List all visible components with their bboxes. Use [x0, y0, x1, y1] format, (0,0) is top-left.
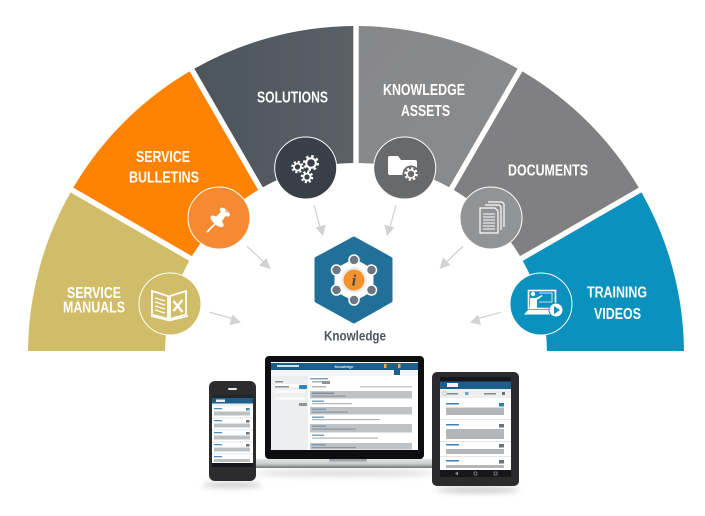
- device: laptop: [240, 356, 456, 477]
- label: service manuals: [63, 285, 125, 317]
- label: service bulletins: BULLETINS: [129, 170, 199, 187]
- arrow: bulletins to knowledge: [247, 246, 270, 269]
- label: training videos: VIDEOS: [594, 306, 641, 323]
- icon: document stack: [460, 187, 522, 249]
- label: service manuals: MANUALS: [63, 300, 125, 317]
- label: documents: DOCUMENTS: [508, 163, 588, 180]
- icon: book with tools: [139, 273, 201, 335]
- icon: knowledge hexagon: [316, 238, 391, 322]
- panel: service manuals segment: [28, 192, 189, 351]
- panel: service bulletins segment: [73, 71, 258, 256]
- label: training videos: [587, 285, 647, 323]
- label: knowledge assets: KNOWLEDGE: [383, 82, 465, 99]
- label: knowledge assets: ASSETS: [401, 103, 450, 120]
- icon: knowledge hexagon: i: [352, 272, 357, 290]
- icon: folder with gear: [374, 137, 436, 199]
- label: service bulletins: [129, 149, 199, 187]
- device: phone: [202, 381, 262, 488]
- heading: knowledge: Knowledge: [324, 328, 386, 344]
- label: knowledge assets: [383, 82, 465, 120]
- label: service bulletins: SERVICE: [136, 149, 190, 166]
- panel: documents segment: [454, 71, 639, 256]
- label: training videos: TRAINING: [587, 285, 647, 302]
- panel: knowledge assets segment: [359, 26, 518, 187]
- panel: solutions segment: [194, 26, 353, 187]
- label: solutions: SOLUTIONS: [257, 90, 328, 107]
- icon: push pin: [188, 187, 250, 249]
- device: laptop: Knowledge: [335, 365, 353, 369]
- arrow: assets to knowledge: [384, 205, 396, 236]
- arrow: manuals to knowledge: [210, 312, 241, 325]
- label: service manuals: SERVICE: [67, 285, 121, 302]
- arrow: solutions to knowledge: [314, 205, 326, 236]
- arrow: videos to knowledge: [470, 312, 501, 325]
- icon: training video laptop: [510, 273, 572, 335]
- arrow: documents to knowledge: [440, 246, 463, 269]
- device: tablet: [432, 372, 520, 493]
- panel: training videos segment: [523, 192, 684, 351]
- icon: gears: [275, 137, 337, 199]
